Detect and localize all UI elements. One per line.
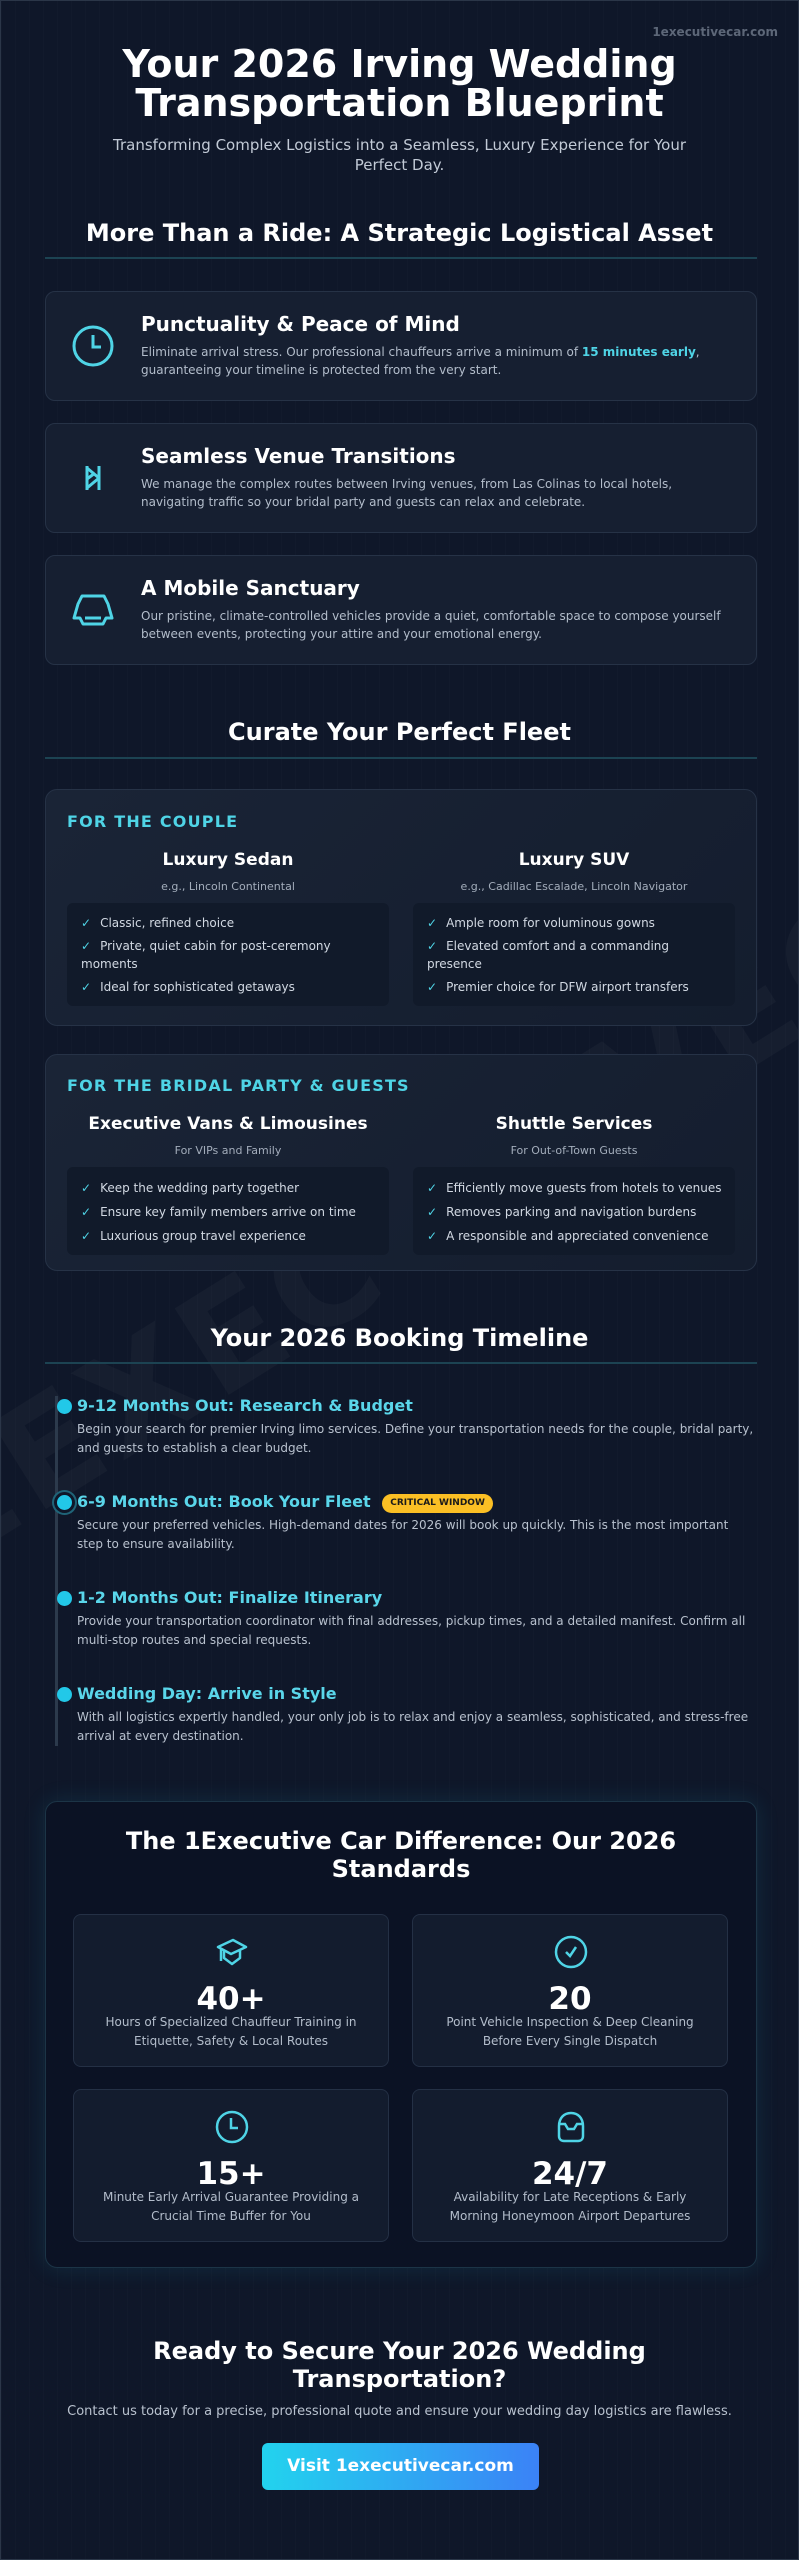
cta text: Contact us today for a precise, professional quote and ensure your wedding day logistics are flawless. xyxy=(67,2404,732,2419)
cta button xyxy=(262,2443,539,2490)
column: luxury suv: Luxury SUV xyxy=(519,850,629,870)
step 3 xyxy=(57,1588,745,1647)
panel heading: FOR THE COUPLE xyxy=(67,812,238,831)
step 2 xyxy=(52,1490,728,1551)
stat: training xyxy=(73,1914,389,2067)
standards title: Standards xyxy=(332,1855,470,1883)
column: luxury suv: ✓ Elevated comfort and a commanding presence xyxy=(427,939,669,971)
card: venue transitions xyxy=(45,423,757,533)
cta button: Visit 1executivecar.com xyxy=(287,2456,514,2476)
column: shuttle xyxy=(413,1114,721,1243)
panel heading: FOR THE BRIDAL PARTY & GUESTS xyxy=(67,1076,410,1095)
icon: seat xyxy=(72,594,114,626)
card text: Our pristine, climate-controlled vehicles provide a quiet, comfortable space to compose yourself between events, protecting your attire and your emotional energy. xyxy=(141,609,721,641)
column: luxury suv: ✓ Premier choice for DFW airport transfers xyxy=(427,980,689,994)
column: luxury sedan: e.g., Lincoln Continental xyxy=(161,880,295,893)
stat: inspection: 20 xyxy=(548,1981,592,2017)
cta heading: Ready to Secure Your 2026 Wedding xyxy=(153,2337,646,2365)
column: shuttle: For Out-of-Town Guests xyxy=(511,1144,637,1157)
stat: early arrival xyxy=(73,2089,389,2242)
heading: strategic asset: More Than a Ride: A Strategic Logistical Asset xyxy=(86,219,713,247)
column: shuttle: ✓ Efficiently move guests from hotels to venues xyxy=(427,1181,721,1195)
panel: for the couple xyxy=(45,789,757,1026)
card: punctuality xyxy=(45,291,757,401)
standards title: The 1Executive Car Difference: Our 2026 xyxy=(126,1827,676,1855)
stat: inspection xyxy=(412,1914,728,2067)
column: shuttle: ✓ A responsible and appreciated convenience xyxy=(427,1229,708,1243)
stat: availability: 24/7 xyxy=(532,2156,608,2192)
column: luxury suv: e.g., Cadillac Escalade, Lincoln Navigator xyxy=(461,880,687,893)
column: luxury sedan: ✓ Classic, refined choice xyxy=(81,916,234,930)
step 3: 1-2 Months Out: Finalize Itinerary xyxy=(77,1588,382,1607)
step 3: Provide your transportation coordinator with final addresses, pickup times, and a detailed manifest. Confirm all multi-stop routes and special requests. xyxy=(77,1614,745,1647)
step 4: With all logistics expertly handled, your only job is to relax and enjoy a seamless, sophisticated, and stress-free arrival at every destination. xyxy=(77,1710,748,1743)
stat: early arrival: 15+ xyxy=(196,2156,266,2192)
icon: clock xyxy=(216,2110,248,2144)
stat: availability: Availability for Late Receptions & Early Morning Honeymoon Airport Departures xyxy=(450,2190,690,2223)
stat: early arrival: Minute Early Arrival Guarantee Providing a Crucial Time Buffer for You xyxy=(103,2190,359,2223)
card: mobile sanctuary xyxy=(45,555,757,665)
column: vans: ✓ Keep the wedding party together xyxy=(81,1181,299,1195)
heading: fleet: Curate Your Perfect Fleet xyxy=(228,718,571,746)
panel: standards xyxy=(45,1801,757,2268)
column: vans: Executive Vans & Limousines xyxy=(88,1114,368,1134)
stat: training: Hours of Specialized Chauffeur Training in Etiquette, Safety & Local Routes xyxy=(105,2015,357,2048)
icon: route xyxy=(86,466,100,490)
timeline xyxy=(52,1396,753,1746)
cta heading: Transportation? xyxy=(293,2365,506,2393)
stat: inspection: Point Vehicle Inspection & Deep Cleaning Before Every Single Dispatch xyxy=(446,2015,694,2048)
column: vans: ✓ Ensure key family members arrive on time xyxy=(81,1205,356,1219)
icon: check circle xyxy=(554,1936,588,1968)
step 1: 9-12 Months Out: Research & Budget xyxy=(77,1396,413,1415)
column: shuttle: Shuttle Services xyxy=(496,1114,652,1134)
step 1: Begin your search for premier Irving limo services. Define your transportation needs for the couple, bridal party, and guests to establish a clear budget. xyxy=(77,1422,753,1455)
step 2: 6-9 Months Out: Book Your Fleet xyxy=(77,1492,371,1511)
step 4 xyxy=(57,1684,748,1743)
column: luxury sedan: ✓ Ideal for sophisticated getaways xyxy=(81,980,295,994)
title: Transportation Blueprint xyxy=(135,81,664,125)
column: vans: For VIPs and Family xyxy=(175,1144,281,1157)
column: luxury sedan xyxy=(67,850,389,1006)
step 4: Wedding Day: Arrive in Style xyxy=(77,1684,337,1703)
stat: training: 40+ xyxy=(196,1981,266,2017)
title xyxy=(122,42,677,125)
card text: Eliminate arrival stress. Our professional chauffeurs arrive a minimum of 15 minutes early, guaranteeing your timeline is protected from the very start. xyxy=(141,345,700,377)
stat: availability xyxy=(412,2089,728,2242)
step 1 xyxy=(57,1396,753,1455)
heading: timeline: Your 2026 Booking Timeline xyxy=(211,1324,588,1352)
column: luxury sedan: ✓ Private, quiet cabin for post-ceremony moments xyxy=(81,939,331,971)
icon: graduation cap xyxy=(216,1938,248,1966)
card title: Seamless Venue Transitions xyxy=(141,444,456,468)
panel: bridal party xyxy=(45,1054,757,1271)
column: luxury suv xyxy=(413,850,689,994)
card text: We manage the complex routes between Irving venues, from Las Colinas to local hotels, navigating traffic so your bridal party and guests can relax and celebrate. xyxy=(141,477,672,509)
watermark: site url: 1executivecar.com xyxy=(652,25,778,39)
cta heading xyxy=(153,2337,646,2393)
column: luxury sedan: Luxury Sedan xyxy=(163,850,293,870)
step 2: Secure your preferred vehicles. High-demand dates for 2026 will book up quickly. This is the most important step to ensure availability. xyxy=(77,1518,728,1551)
title: Your 2026 Irving Wedding xyxy=(122,42,677,86)
card title: Punctuality & Peace of Mind xyxy=(141,312,460,336)
column: shuttle: ✓ Removes parking and navigation burdens xyxy=(427,1205,696,1219)
step 2: CRITICAL WINDOW xyxy=(390,1498,485,1508)
standards title xyxy=(126,1827,676,1883)
icon: clock xyxy=(72,326,114,366)
icon: helmet xyxy=(558,2112,584,2142)
card title: A Mobile Sanctuary xyxy=(141,576,360,600)
column: vans xyxy=(67,1114,389,1255)
column: vans: ✓ Luxurious group travel experience xyxy=(81,1229,306,1243)
column: luxury suv: ✓ Ample room for voluminous gowns xyxy=(427,916,655,930)
subtitle: Transforming Complex Logistics into a Seamless, Luxury Experience for Your Perfect Day. xyxy=(113,136,686,174)
